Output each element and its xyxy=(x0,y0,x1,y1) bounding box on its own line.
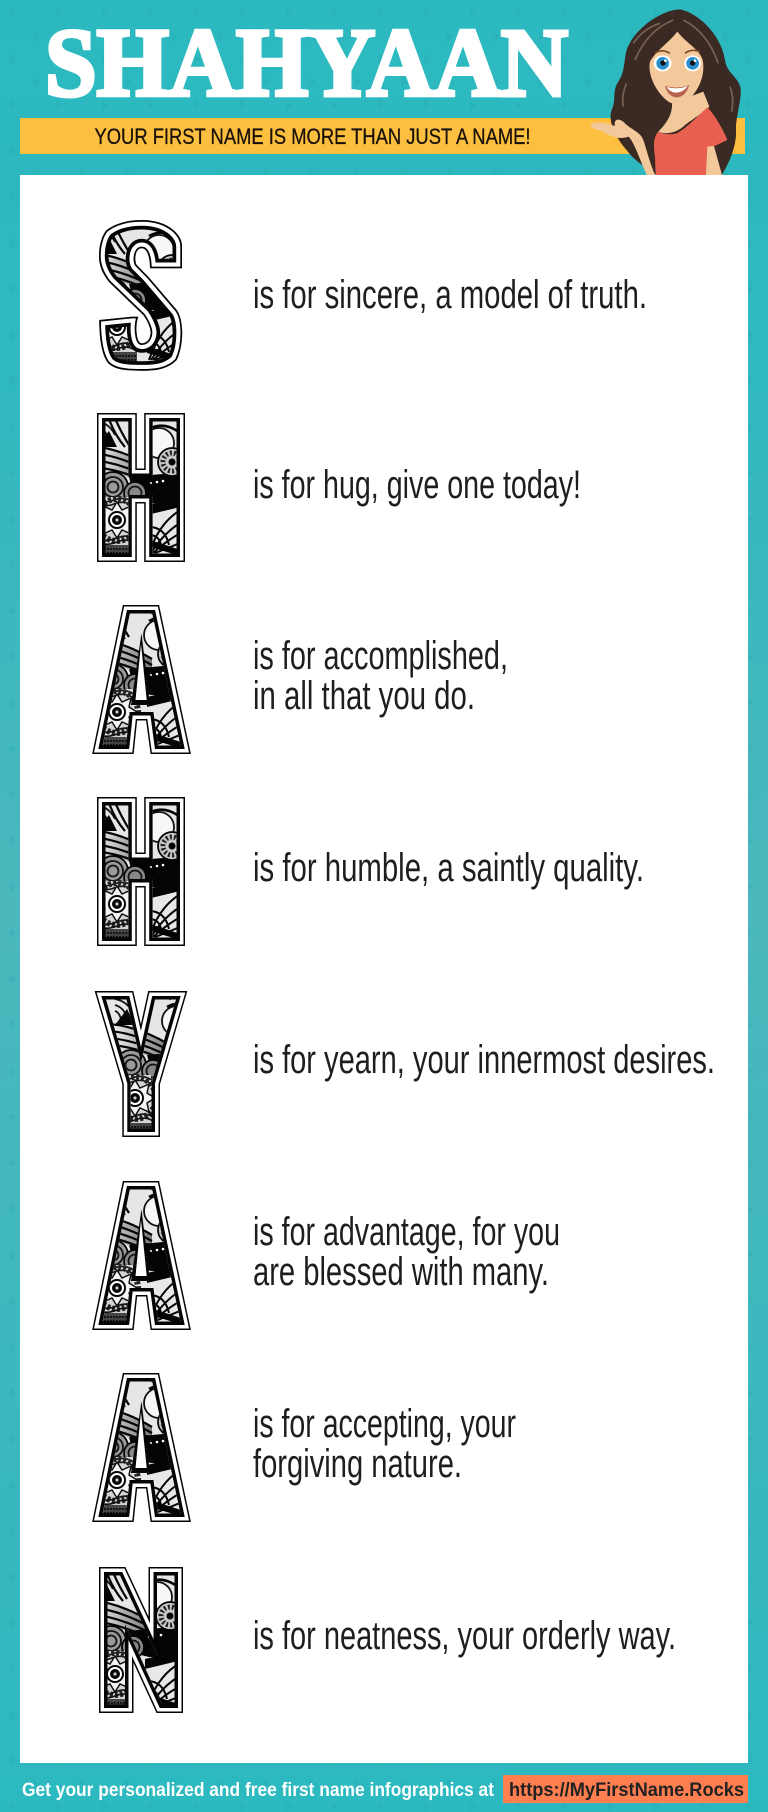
row Y xyxy=(105,986,715,1146)
icon: cartoon woman xyxy=(590,9,741,175)
text A: are blessed with many. xyxy=(253,1250,549,1294)
text A: is for accepting, your xyxy=(253,1402,516,1446)
letter S xyxy=(87,215,207,375)
text A: forgiving nature. xyxy=(253,1442,462,1486)
footer xyxy=(22,1775,748,1803)
url box xyxy=(503,1775,748,1803)
letter Y xyxy=(105,986,225,1146)
row A xyxy=(87,600,508,760)
url text: https://MyFirstName.Rocks xyxy=(509,1780,744,1801)
row A2 xyxy=(87,1176,560,1336)
letter A xyxy=(87,600,207,760)
letter N xyxy=(85,1562,205,1722)
text A: is for accomplished, xyxy=(253,634,508,678)
text A xyxy=(253,634,508,718)
footer text: Get your personalized and free first name infographics at xyxy=(22,1780,495,1801)
row N xyxy=(85,1562,676,1722)
subtitle: YOUR FIRST NAME IS MORE THAN JUST A NAME! xyxy=(94,124,530,149)
letter H xyxy=(87,792,207,952)
row A3 xyxy=(87,1368,516,1528)
row H2 xyxy=(87,792,644,952)
row H xyxy=(87,408,581,568)
text A: is for advantage, for you xyxy=(253,1210,560,1254)
row S xyxy=(87,215,647,375)
text H: is for hug, give one today! xyxy=(253,463,581,507)
letter A xyxy=(87,1368,207,1528)
letter H xyxy=(87,408,207,568)
letter A xyxy=(87,1176,207,1336)
text A xyxy=(253,1402,516,1486)
title: SHAHYAAN xyxy=(45,10,568,118)
text A: in all that you do. xyxy=(253,674,475,718)
text A xyxy=(253,1210,560,1294)
banner xyxy=(20,118,745,154)
